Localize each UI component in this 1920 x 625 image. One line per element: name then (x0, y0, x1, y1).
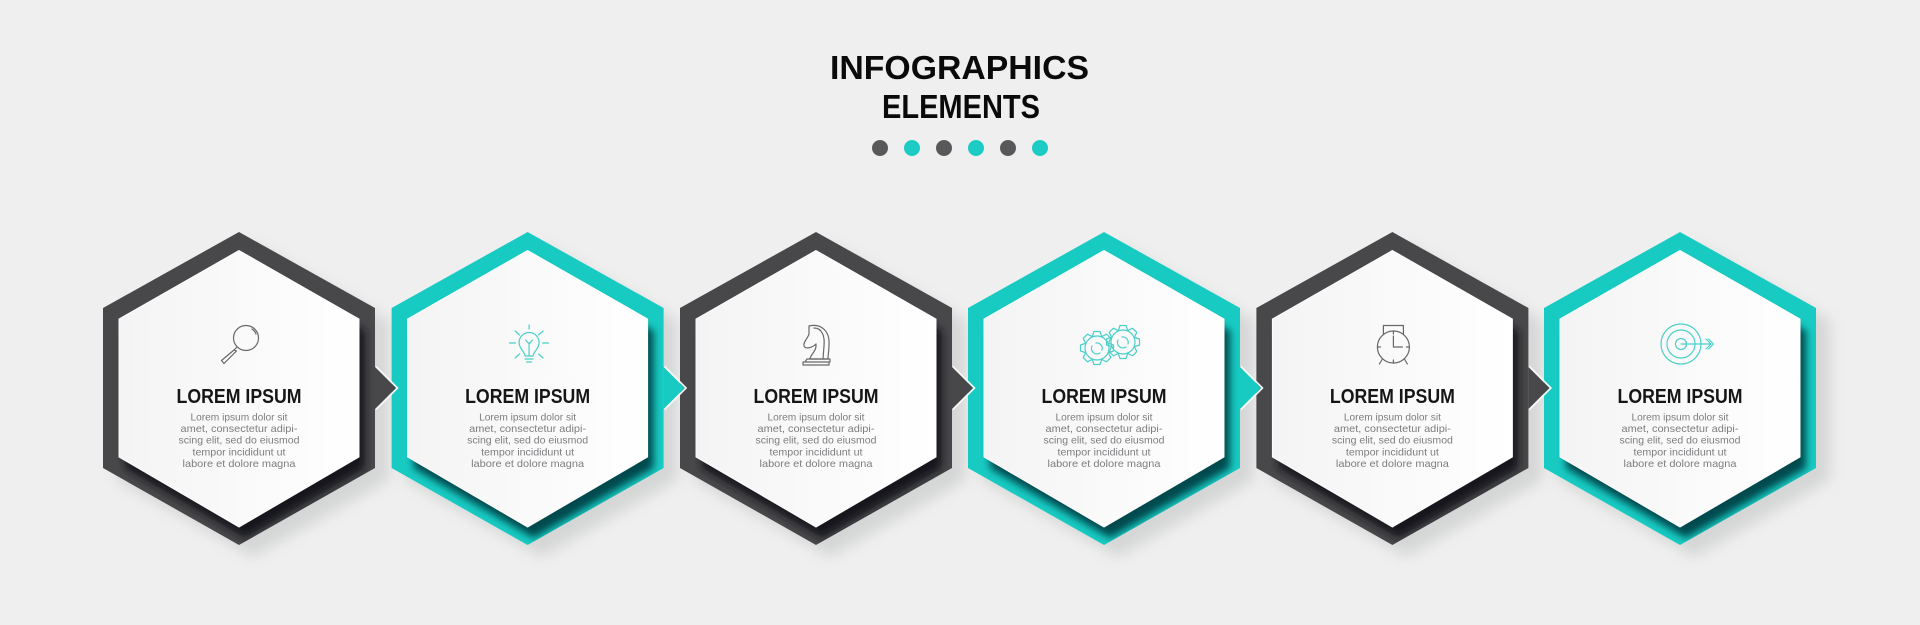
panel: step 4 (968, 232, 1254, 557)
body text (178, 412, 300, 470)
arrow: step 1 to 2 (375, 367, 396, 409)
body text: scing elit, sed do eiusmod (178, 435, 300, 447)
body text: tempor incididunt ut (1346, 447, 1439, 459)
arrow: step 5 outline (1529, 366, 1551, 410)
body text (1044, 412, 1165, 470)
dots row (872, 140, 1048, 156)
body text: amet, consectetur adipi- (758, 423, 875, 435)
body text: scing elit, sed do eiusmod (1332, 435, 1453, 447)
body text: Lorem ipsum dolor sit (479, 412, 576, 424)
body text: labore et dolore magna (1336, 458, 1449, 470)
body text: amet, consectetur adipi- (180, 423, 298, 435)
body text: tempor incididunt ut (192, 447, 286, 459)
title (830, 49, 1089, 125)
icon: chess knight (803, 325, 830, 365)
body text (1620, 412, 1741, 470)
heading: LOREM IPSUM (1042, 386, 1166, 408)
body text: tempor incididunt ut (1633, 447, 1727, 459)
arrow: step 1 outline (376, 366, 398, 410)
panel: step 2 (392, 232, 678, 557)
panel: step 6 (1544, 232, 1830, 557)
icon: target with arrow (1661, 324, 1714, 364)
icon: magnifier (222, 326, 258, 364)
heading: LOREM IPSUM (754, 386, 878, 408)
body text: Lorem ipsum dolor sit (1632, 412, 1729, 424)
icon: alarm clock (1377, 326, 1409, 364)
panel: step 1 (103, 232, 389, 557)
heading: LOREM IPSUM (1330, 386, 1455, 408)
body text: scing elit, sed do eiusmod (755, 435, 877, 447)
body text (467, 412, 588, 470)
panel: step 5 (1256, 232, 1542, 557)
body text: labore et dolore magna (183, 458, 296, 470)
body text: Lorem ipsum dolor sit (190, 412, 288, 424)
arrow: step 3 to 4 (952, 367, 973, 409)
body text (1332, 412, 1453, 470)
body text: tempor incididunt ut (481, 447, 574, 459)
body text: tempor incididunt ut (769, 447, 863, 459)
body text: amet, consectetur adipi- (1622, 423, 1739, 435)
body text: scing elit, sed do eiusmod (1619, 435, 1741, 447)
arrow: step 2 outline (665, 366, 686, 410)
body text: labore et dolore magna (760, 458, 873, 470)
arrow: step 5 to 6 (1528, 367, 1549, 409)
icon: light bulb (510, 325, 549, 362)
body text: amet, consectetur adipi- (1046, 423, 1163, 435)
title: ELEMENTS (882, 88, 1040, 125)
title: INFOGRAPHICS (830, 49, 1089, 86)
icon: gears (1080, 326, 1140, 364)
body text: amet, consectetur adipi- (1334, 423, 1451, 435)
arrow: step 4 outline (1241, 366, 1262, 410)
body text: Lorem ipsum dolor sit (1056, 412, 1153, 424)
body text: scing elit, sed do eiusmod (1043, 435, 1165, 447)
body text: amet, consectetur adipi- (469, 423, 587, 435)
heading: LOREM IPSUM (177, 386, 301, 408)
body text: labore et dolore magna (1624, 458, 1737, 470)
body text: labore et dolore magna (1048, 458, 1161, 470)
arrow: step 4 to 5 (1240, 367, 1261, 409)
body text: Lorem ipsum dolor sit (768, 412, 865, 424)
arrow: step 3 outline (953, 366, 974, 410)
body text: labore et dolore magna (471, 458, 584, 470)
body text: tempor incididunt ut (1057, 447, 1151, 459)
body text: scing elit, sed do eiusmod (467, 435, 588, 447)
heading: LOREM IPSUM (1618, 386, 1742, 408)
body text (756, 412, 877, 470)
panel: step 3 (680, 232, 966, 557)
body text: Lorem ipsum dolor sit (1344, 412, 1441, 424)
heading: LOREM IPSUM (465, 386, 590, 408)
arrow: step 2 to 3 (664, 367, 685, 409)
